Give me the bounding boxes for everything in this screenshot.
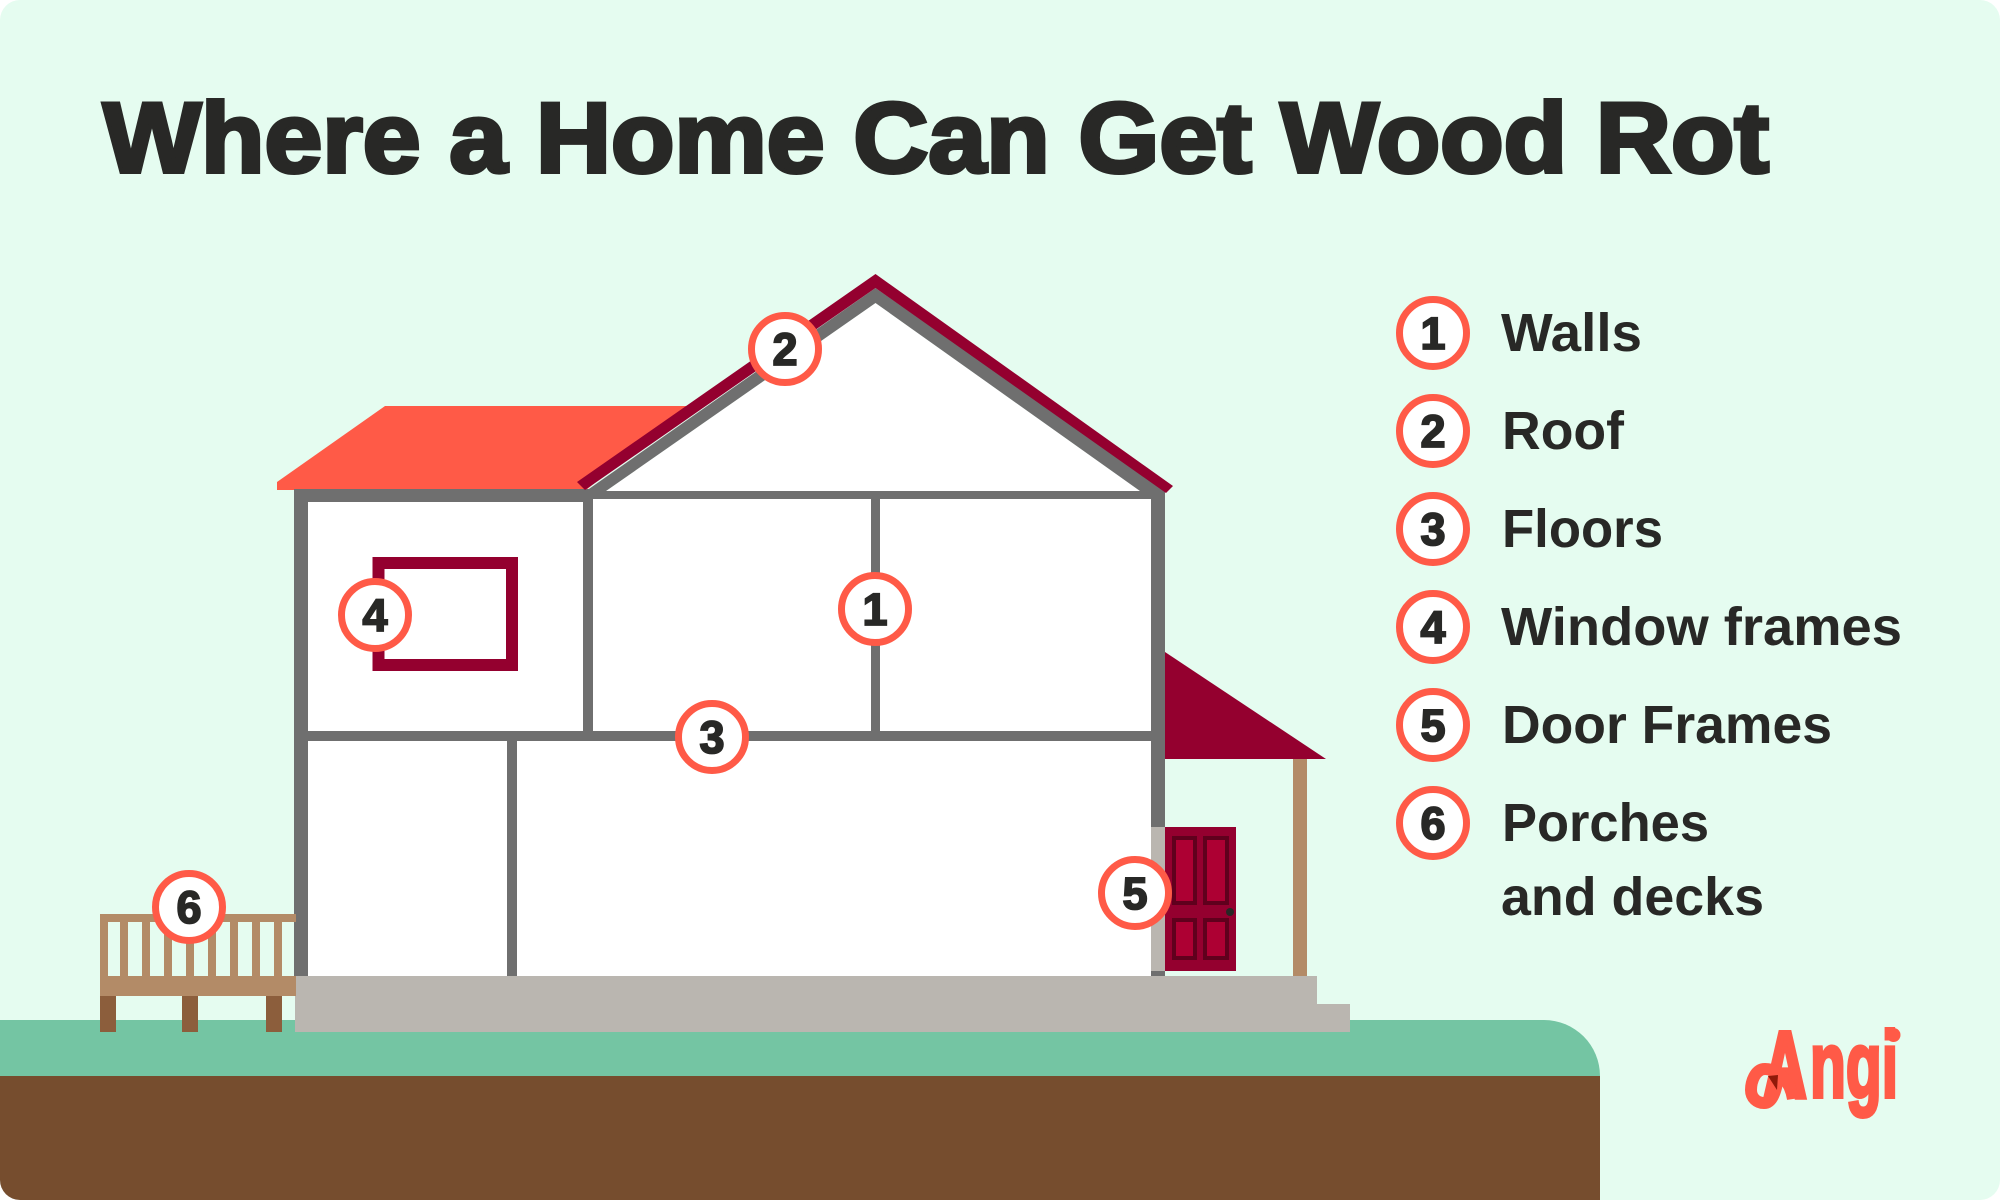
legend item: roof: 2: [1420, 406, 1446, 457]
legend item: porches and decks: 6: [1420, 798, 1446, 849]
upper interior wall center: [871, 495, 880, 735]
marker 3: 3: [699, 712, 725, 763]
legend item: walls: 1: [1420, 308, 1446, 359]
right wall base: [1151, 971, 1165, 977]
legend item: walls: [1400, 300, 1642, 366]
grass strip: [0, 1020, 1600, 1076]
Angi logo: [1751, 1012, 1900, 1117]
window frame: [372, 557, 518, 671]
second floor beam: [300, 731, 1155, 741]
left exterior wall: [294, 489, 308, 979]
deck legs: [100, 996, 282, 1032]
gable gray framing: [586, 288, 1166, 491]
attic beam: [583, 491, 1165, 499]
lower interior wall: [507, 735, 517, 977]
upper left ceiling beam: [294, 489, 590, 502]
marker 4: [342, 582, 408, 648]
legend item: window frames: 4: [1420, 602, 1446, 653]
legend item: door frames: [1400, 692, 1832, 758]
legend item: door frames: 5: [1420, 700, 1446, 751]
legend item: door frames: Door Frames: [1502, 695, 1832, 755]
marker 1: 1: [862, 584, 888, 635]
marker 5: 5: [1122, 868, 1148, 919]
left roof: [277, 406, 690, 490]
legend item: porches and decks: Porches: [1502, 793, 1709, 853]
marker 2: 2: [772, 324, 798, 375]
legend item: porches and decks: and decks: [1501, 867, 1764, 927]
legend item: walls: Walls: [1501, 303, 1642, 363]
legend item: floors: 3: [1420, 504, 1446, 555]
title: Where a Home Can Get Wood Rot: [103, 82, 1769, 193]
upper interior wall left: [583, 491, 593, 736]
deck platform and railing: [100, 914, 296, 996]
legend: [1400, 300, 1902, 927]
legend item: roof: Roof: [1502, 401, 1625, 461]
foundation and step: [295, 976, 1350, 1032]
porch roof: [1165, 652, 1326, 759]
marker 2: [752, 316, 818, 382]
house illustration: [277, 274, 1350, 1032]
Angi logo: ngi: [1810, 1012, 1898, 1117]
porch post: [1293, 759, 1307, 976]
door frame: [1151, 827, 1165, 971]
legend item: floors: Floors: [1502, 499, 1663, 559]
marker 5: [1102, 860, 1168, 926]
marker 4: 4: [362, 590, 388, 641]
house white interior: [308, 303, 1151, 976]
legend item: window frames: Window frames: [1501, 597, 1902, 657]
marker 1: [842, 576, 908, 642]
marker 6: 6: [176, 882, 202, 933]
Angi logo: A: [1764, 1013, 1806, 1117]
soil: [0, 1076, 1600, 1200]
marker 6: [156, 874, 222, 940]
main roof ridge: [577, 274, 1173, 493]
legend item: roof: [1400, 398, 1625, 464]
legend item: floors: [1400, 496, 1663, 562]
marker 3: [678, 704, 746, 770]
right exterior wall: [1151, 491, 1165, 827]
door: [1165, 827, 1236, 971]
legend item: porches and decks: [1400, 790, 1764, 927]
deck: [100, 914, 296, 1032]
